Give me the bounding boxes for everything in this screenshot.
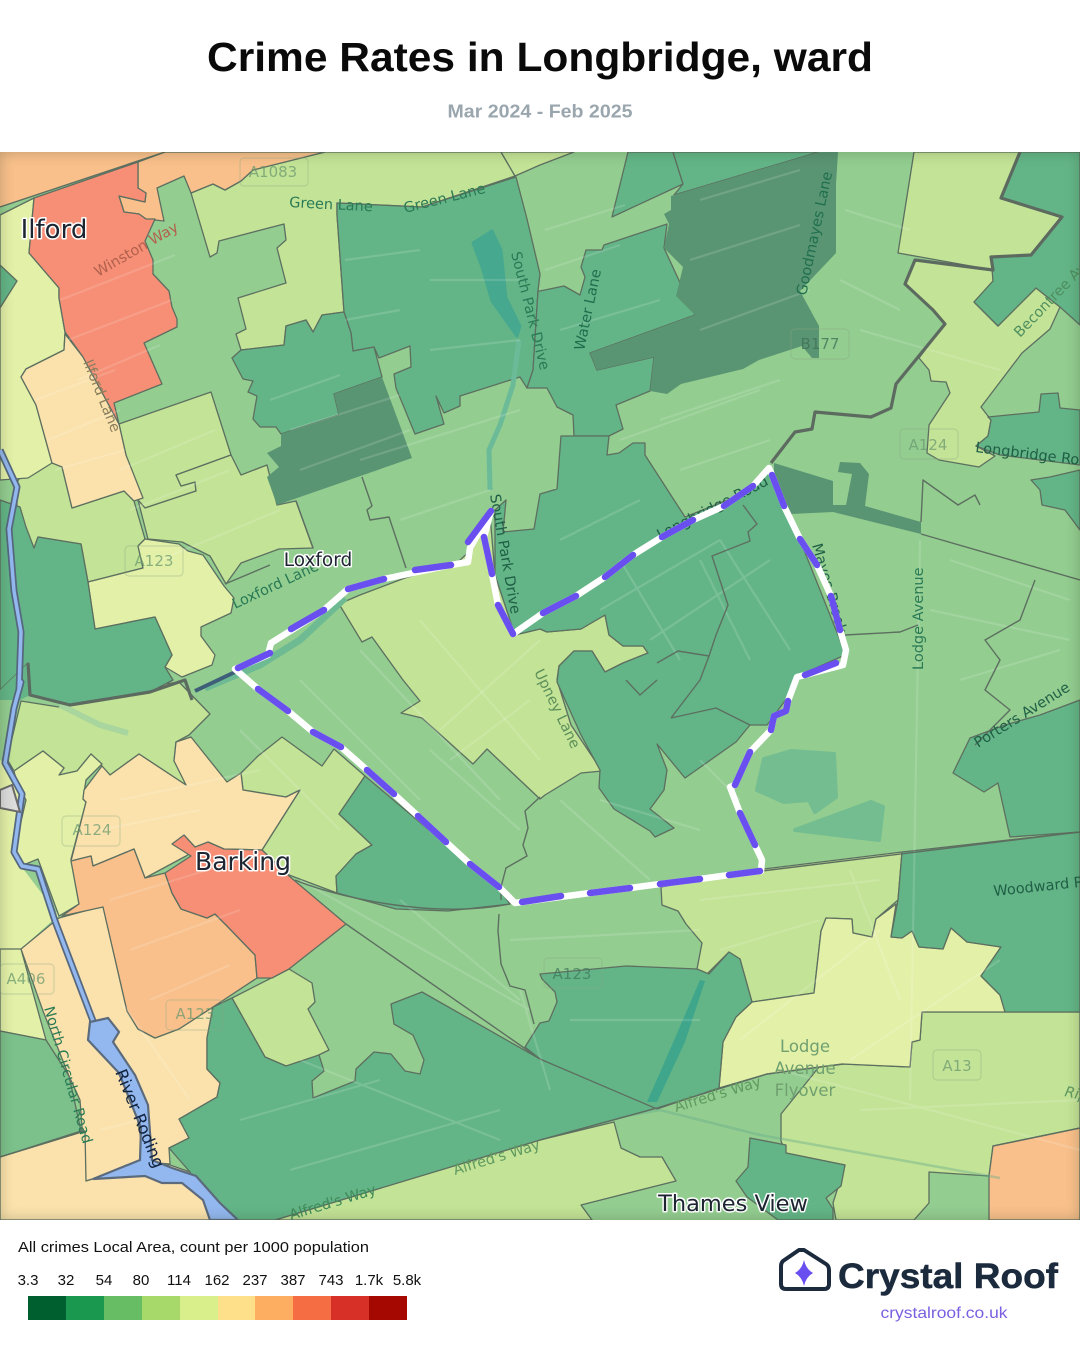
label: Lodge Avenue Flyover: Lodge <box>780 1037 830 1056</box>
zone: bottom left mid green <box>0 1031 81 1157</box>
street labels: Lodge Avenue <box>911 567 927 670</box>
logo: Crystal Roof <box>779 1248 1058 1322</box>
street labels: South Park Drive <box>486 493 523 615</box>
street labels: Green Lane <box>289 195 373 215</box>
legend value labels: 80 <box>133 1272 149 1289</box>
river Roding <box>0 450 238 1220</box>
legend value labels: 743 <box>318 1272 344 1289</box>
street labels: Alfred's Way <box>451 1137 542 1179</box>
street labels: Ilford Lane <box>79 358 123 435</box>
water: ponds and streams <box>60 231 1000 1178</box>
street labels: Winston Way <box>92 219 182 280</box>
legend value labels: 5.8k <box>393 1272 422 1289</box>
legend colour swatches <box>28 1296 407 1320</box>
street labels: Upney Lane <box>530 667 583 751</box>
zones: orange areas <box>0 152 1080 1220</box>
zones: cream areas <box>0 334 300 1220</box>
legend value labels: 162 <box>204 1272 230 1289</box>
place labels: Loxford <box>284 550 352 571</box>
thick district boundary <box>28 152 1062 705</box>
street labels: Mayes Brook <box>808 542 849 636</box>
place labels <box>21 215 808 1217</box>
legend value labels <box>18 1272 422 1289</box>
road number shields: A13 <box>942 1057 972 1075</box>
street labels: Porters Avenue <box>972 680 1073 751</box>
road network lines <box>35 170 1080 1170</box>
zone boundary lines <box>0 152 1080 1157</box>
street labels: Alfred's Way <box>672 1074 763 1116</box>
legend title: All crimes Local Area, count per 1000 population <box>18 1239 369 1256</box>
road number shields: B177 <box>801 335 839 353</box>
street labels: South Park Drive <box>507 250 552 372</box>
legend value labels: 3.3 <box>18 1272 38 1289</box>
zones: high crime red areas <box>29 162 346 978</box>
wordmark: Crystal Roof <box>838 1257 1058 1296</box>
legend value labels: 387 <box>280 1272 306 1289</box>
panel: crime rate map <box>0 152 1080 1220</box>
icon: house with star <box>781 1250 829 1289</box>
legend value labels: 114 <box>167 1272 191 1289</box>
subtitle: date range: Mar 2024 - Feb 2025 <box>448 102 632 122</box>
label: Lodge Avenue Flyover: Avenue <box>774 1059 836 1078</box>
legend value labels: 54 <box>96 1272 112 1289</box>
street labels <box>40 170 1080 1224</box>
road number shields: A123 <box>553 965 591 983</box>
road number shields: A124 <box>909 436 947 454</box>
label: Lodge Avenue Flyover: Flyover <box>775 1081 836 1100</box>
street labels: Green Lane <box>402 181 487 217</box>
street labels: Loxford Lane <box>230 559 321 613</box>
legend value labels: 1.7k <box>355 1272 384 1289</box>
ward boundary: white base line <box>235 468 846 903</box>
title: Crime Rates in Longbridge, ward <box>207 34 873 80</box>
label: Lodge Avenue Flyover <box>774 1037 836 1100</box>
place labels: Ilford <box>21 215 87 245</box>
zones: low crime darker green areas <box>0 152 1080 1220</box>
legend value labels: 237 <box>242 1272 268 1289</box>
street labels: Goodmayes Lane <box>794 170 836 297</box>
street labels: Longbridge Road <box>655 474 771 544</box>
place labels: Barking <box>195 847 291 876</box>
legend value labels: 32 <box>58 1272 74 1289</box>
road number shields: A124 <box>73 821 111 839</box>
legend: colour scale <box>18 1272 422 1320</box>
road number shields: A1083 <box>249 163 297 181</box>
road number shields: A123 <box>176 1005 214 1023</box>
zones: lowest crime dark areas <box>267 152 921 534</box>
street labels: North Circular Road <box>40 1005 95 1146</box>
ward boundary: purple dashes <box>238 475 840 902</box>
zones: low crime yellow-green areas <box>7 152 1080 1220</box>
map base area <box>0 152 1080 1220</box>
road number shields <box>0 158 981 1080</box>
street labels: River Roding <box>111 1066 168 1171</box>
street labels: Water Lane <box>572 268 605 352</box>
road number shields: A123 <box>135 552 173 570</box>
website url: crystalroof.co.uk <box>880 1305 1009 1322</box>
road number shields: A406 <box>7 970 45 988</box>
place labels: Thames View <box>657 1191 808 1217</box>
zones: pale yellow areas <box>0 198 1005 1088</box>
